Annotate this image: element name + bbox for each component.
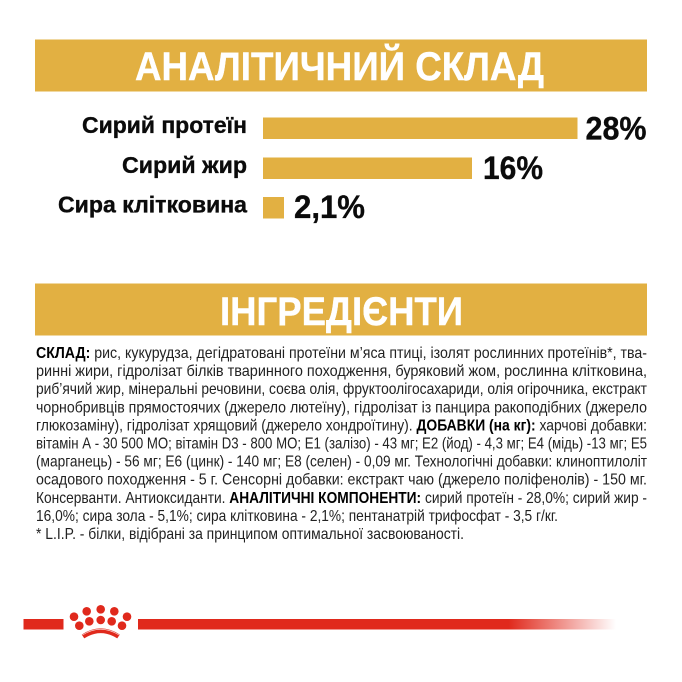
icon: crown (70, 605, 131, 636)
panel: analytical composition (35, 40, 647, 225)
row: crude fat (122, 150, 543, 186)
row: crude protein: 28% (586, 110, 647, 146)
row: crude fat: 16% (483, 150, 543, 186)
row: crude fibre (58, 189, 365, 225)
brand footer: red line with crown (24, 605, 616, 636)
row: crude protein (82, 110, 647, 146)
heading banner: analytical composition: АНАЛІТИЧНИЙ СКЛАД (135, 43, 544, 89)
row: crude fibre: 2,1% (294, 189, 365, 225)
row: crude protein: Сирий протеїн (82, 112, 247, 138)
text block: ingredients list: 16,0%; сира зола - 5,1%; сира клітковина - 2,1%; пентанатрій трифосфат - 3,5 г/кг. (36, 508, 558, 525)
heading banner: ingredients (35, 284, 647, 336)
row: crude fat: Сирий жир (122, 152, 247, 178)
text block: ingredients list: глюкозаміну), гідролізат хрящовий (джерело хондроїтину). ДОБАВКИ (на кг): харчові добавки: (36, 417, 647, 434)
row: crude fibre: Сира клітковина (58, 192, 247, 218)
text block: ingredients list (36, 345, 648, 543)
heading banner: analytical composition (35, 40, 647, 92)
text block: ingredients list: Консерванти. Антиоксиданти. АНАЛІТИЧНІ КОМПОНЕНТИ: сирий протеїн - 28,0%; сирий жир - (36, 490, 647, 507)
heading banner: ingredients: ІНГРЕДІЄНТИ (220, 290, 463, 334)
text block: ingredients list: * L.I.P. - білки, відібрані за принципом оптимальної засвоюваності. (36, 526, 464, 543)
bar chart (58, 110, 647, 225)
